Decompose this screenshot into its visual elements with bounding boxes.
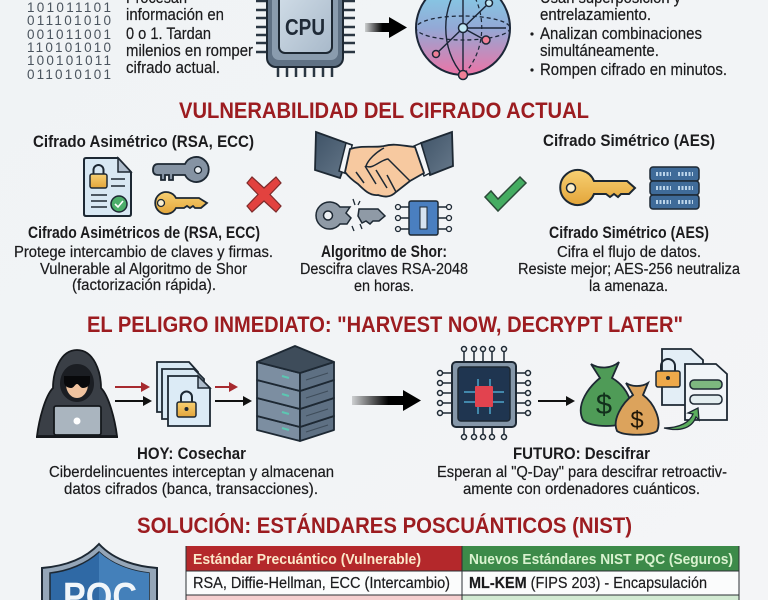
text: symmetric description: Cifrado Simétrico (AES) <box>549 224 709 242</box>
icon: hacker with laptop <box>36 350 118 437</box>
text: symmetric description: la amenaza. <box>589 278 668 295</box>
arrow: chip to loot <box>538 396 575 406</box>
icon: money bags: $ <box>630 407 644 434</box>
arrow: today to future <box>352 390 421 411</box>
icon: broken key <box>316 199 385 231</box>
text: asymmetric description: Cifrado Asimétricos de (RSA, ECC) <box>28 224 260 242</box>
text block: quantum computing: Rompen cifrado en minutos. <box>540 61 727 79</box>
text: asymmetric description: (factorización rápida). <box>72 277 216 294</box>
table row: key exchange <box>186 571 739 595</box>
heading: asymmetric: Cifrado Asimétrico (RSA, ECC) <box>33 133 254 151</box>
table header: pre-quantum: Estándar Precuántico (Vulnerable) <box>193 551 421 568</box>
text block: quantum computing: entrelazamiento. <box>540 6 651 24</box>
icon: handshake <box>315 132 453 197</box>
text: symmetric description: Resiste mejor; AES-256 neutraliza <box>518 261 740 278</box>
icon: quantum chip <box>438 346 530 440</box>
panel: decrypt in the future <box>437 346 727 498</box>
text: decrypt description: FUTURO: Descifrar <box>513 445 651 463</box>
text: Shor description: Descifra claves RSA-2048 <box>300 261 468 278</box>
icon: decrypted documents <box>656 349 727 430</box>
text: decrypt description: Esperan al "Q-Day" para descifrar retroactiv- <box>437 464 727 481</box>
icon: qubit sphere <box>416 0 510 80</box>
icon: PQC shield <box>42 544 157 600</box>
text: harvest description: HOY: Cosechar <box>137 445 247 463</box>
text: Shor description: en horas. <box>354 278 414 295</box>
panel: symmetric encryption <box>485 132 740 295</box>
icon: green check <box>485 177 526 211</box>
binary digits <box>27 0 111 82</box>
panel: harvest today <box>36 346 334 498</box>
text block: classical computing: 0 o 1. Tardan <box>126 25 211 43</box>
icon: quantum circuit <box>396 201 452 235</box>
table row: key exchange: RSA, Diffie-Hellman, ECC (Intercambio) <box>193 575 450 592</box>
binary digits: 011010101 <box>27 67 111 82</box>
heading: symmetric: Cifrado Simétrico (AES) <box>543 132 715 150</box>
text: Shor description: Algoritmo de Shor: <box>321 243 447 261</box>
arrow: classical to quantum <box>365 17 407 38</box>
text block: quantum computing: Analizan combinaciones <box>540 25 702 43</box>
text block: classical computing: cifrado actual. <box>126 59 220 77</box>
text block: classical computing: milenios en romper <box>126 42 253 60</box>
arrows: data flow to server <box>215 382 252 406</box>
icon: encrypted documents <box>157 362 210 426</box>
text block: classical computing <box>126 0 253 77</box>
heading: solution: SOLUCIÓN: ESTÁNDARES POSCUÁNTICOS (NIST) <box>137 513 632 538</box>
heading: vulnerability: VULNERABILIDAD DEL CIFRADO ACTUAL <box>179 98 589 123</box>
text: harvest description <box>49 445 334 498</box>
icon: red cross <box>247 177 281 212</box>
text: decrypt description <box>437 445 727 498</box>
table row: key exchange: ML-KEM (FIPS 203) - Encapsulación <box>469 575 707 592</box>
heading: immediate danger: EL PELIGRO INMEDIATO: "HARVEST NOW, DECRYPT LATER" <box>87 312 683 337</box>
panel: Shor algorithm <box>300 132 468 295</box>
binary digits: 011101010 <box>27 13 111 28</box>
icon: gold key <box>155 192 207 214</box>
icon: CPU chip: CPU <box>285 14 325 40</box>
binary digits: 101011101 <box>27 0 111 15</box>
text: asymmetric description <box>14 224 273 294</box>
text: asymmetric description: Protege intercambio de claves y firmas. <box>14 244 273 261</box>
text: decrypt description: amente con ordenadores cuánticos. <box>463 481 700 498</box>
icon: storage server stack <box>257 346 334 441</box>
icon: CPU chip <box>256 0 355 77</box>
binary digits: 001011001 <box>27 27 111 42</box>
icon: locked document <box>84 158 131 216</box>
text: symmetric description: Cifra el flujo de datos. <box>557 244 701 261</box>
arrows: data flow to documents <box>115 382 152 406</box>
text block: quantum computing <box>530 0 727 79</box>
table header: NIST PQC <box>462 546 739 571</box>
binary digits: 110101010 <box>27 40 111 55</box>
text: Shor description <box>300 243 468 295</box>
text block: quantum computing: simultáneamente. <box>540 42 659 60</box>
table header: NIST PQC: Nuevos Estándares NIST PQC (Seguros) <box>469 551 733 568</box>
table: NIST standards <box>186 546 739 600</box>
panel: asymmetric encryption <box>14 133 281 294</box>
icon: large gold key <box>560 170 635 205</box>
binary digits: 100101011 <box>27 53 111 68</box>
text: harvest description: datos cifrados (banca, transacciones). <box>64 481 318 498</box>
icon: money bags <box>581 362 659 435</box>
table row: signatures, cropped <box>186 595 739 600</box>
text: harvest description: Ciberdelincuentes interceptan y almacenan <box>49 464 334 481</box>
text: symmetric description <box>518 224 740 295</box>
text block: classical computing: información en <box>126 6 224 24</box>
text: asymmetric description: Vulnerable al Algoritmo de Shor <box>40 261 247 278</box>
icon: grey key <box>153 157 209 182</box>
icon: money bags: $ <box>596 389 612 421</box>
icon: data server <box>650 167 699 209</box>
table header: pre-quantum <box>186 546 462 571</box>
